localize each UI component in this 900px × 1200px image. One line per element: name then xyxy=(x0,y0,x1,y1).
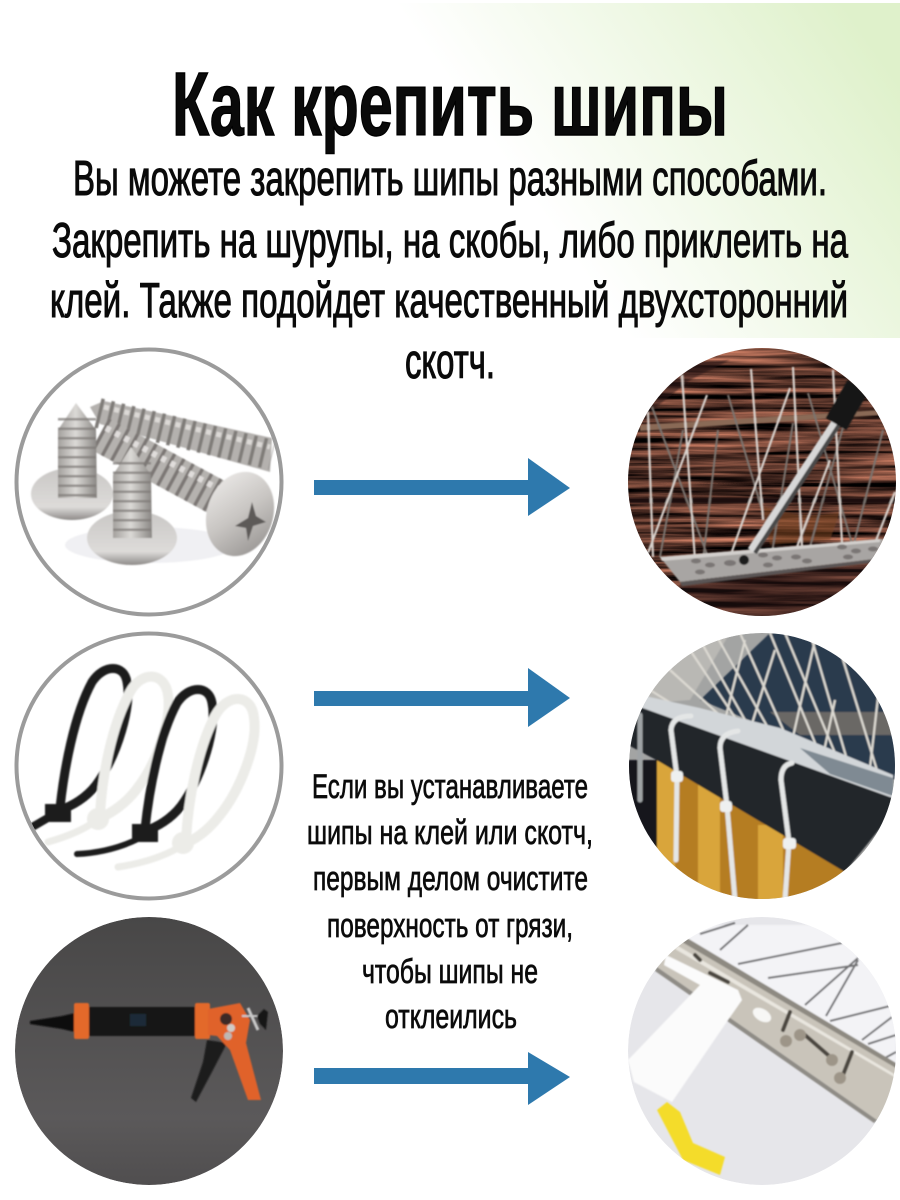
circle outline: cable ties xyxy=(16,634,282,898)
callout text: surface cleaning note: поверхность от грязи, xyxy=(327,907,573,945)
photo: spikes on wooden board xyxy=(628,348,896,616)
callout text: surface cleaning note: Если вы устанавливаете xyxy=(312,768,588,806)
black cable tie 2 xyxy=(77,690,213,854)
arrow 2 xyxy=(314,668,570,727)
photo: cable ties in circle xyxy=(31,662,260,870)
arrow 1 xyxy=(314,458,570,516)
callout text: surface cleaning note: отклеились xyxy=(385,998,517,1036)
intro text block xyxy=(50,152,849,389)
callout text: surface cleaning note: первым делом очистите xyxy=(313,860,588,898)
white cable tie 2 xyxy=(118,699,255,867)
arrow 3 xyxy=(314,1052,570,1105)
callout text: surface cleaning note xyxy=(307,768,593,1036)
callout text: surface cleaning note: чтобы шипы не xyxy=(362,953,538,991)
photo: applying glue to the spike strip xyxy=(628,917,896,1185)
white cable tie 1 xyxy=(48,677,169,842)
black cable tie 1 xyxy=(34,668,128,826)
callout text: surface cleaning note: шипы на клей или скотч, xyxy=(307,814,593,852)
photo: screws in circle xyxy=(30,398,275,566)
intro text block: скотч. xyxy=(405,335,495,389)
photo: sealant gun on dark background xyxy=(15,917,283,1185)
background: green gradient panel xyxy=(300,3,900,338)
circle outline: screws xyxy=(16,350,282,614)
photo: spikes fastened with cable ties xyxy=(628,633,896,905)
